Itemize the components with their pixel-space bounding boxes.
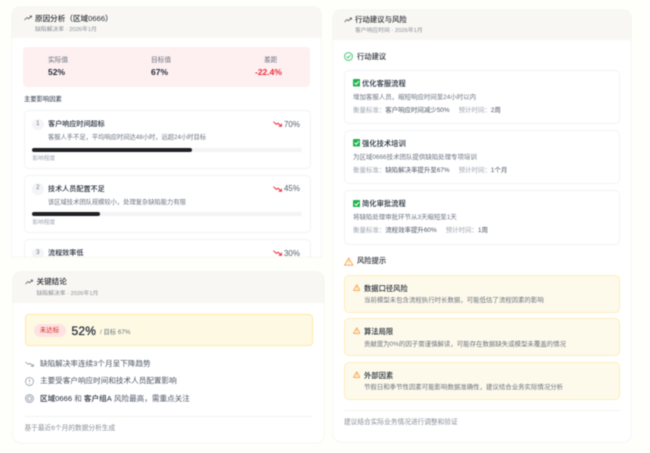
risk card 1: [344, 274, 620, 312]
risk description 2: 贡献度为0%的因子需谨慎解读，可能存在数据缺失或模型未覆盖的情况: [364, 340, 566, 348]
footer note: 建议结合实际业务情况进行调整和验证: [344, 419, 458, 426]
factor percent 2: 45%: [284, 184, 300, 193]
rank number 3: [32, 248, 44, 259]
rank number 1: [32, 118, 44, 130]
factor percent 1: 70%: [284, 120, 300, 128]
section heading: risks: 风险提示: [357, 256, 386, 265]
factor description 2: 该区域技术团队规模较小，处理复杂缺陷能力有限: [48, 199, 186, 206]
factor description 1: 客服人手不足，平均响应时间达48小时，远超24小时目标: [48, 134, 206, 141]
subtitle: 缺陷解决率 · 2026年1月: [35, 26, 97, 32]
conclusion 1: [24, 358, 151, 368]
action card 1: [344, 70, 620, 124]
action description 1: 增加客服人员，缩短响应时间至24小时以内: [353, 94, 476, 100]
value: 52%: 52%: [72, 324, 96, 338]
heading: main factors: 主要影响因素: [24, 96, 62, 103]
heading: actions and risks: 行动建议与风险: [355, 15, 407, 24]
label: target: 目标值: [151, 56, 171, 64]
action description 3: 将缺陷处理审批环节从3天缩短至1天: [353, 214, 457, 221]
factor card 3 (clipped): [24, 239, 310, 298]
icon: trend line: [24, 14, 33, 21]
status box: [24, 314, 312, 346]
badge: below target: 未达标: [40, 327, 59, 334]
value: gap: -22.4%: [255, 67, 282, 77]
rank number 1: 1: [36, 120, 39, 126]
factor card 2: [24, 175, 310, 233]
icon: red down arrow: [272, 120, 283, 128]
risk description 3: 节假日和季节性因素可能影响数据准确性，建议结合业务实际情况分析: [364, 384, 563, 391]
factor card 1: [24, 110, 310, 168]
icon: target circle: [24, 394, 34, 404]
icon: down trend: [24, 362, 34, 368]
conclusion 3: [24, 394, 190, 404]
conclusion text 1: 缺陷解决率连续3个月呈下降趋势: [40, 358, 151, 368]
icon: warning triangle: [344, 257, 354, 266]
icon: red down arrow: [272, 250, 283, 257]
impact label 1: 影响程度: [32, 156, 55, 162]
panel header: cause analysis: [12, 7, 321, 38]
conclusion 2: [24, 376, 177, 386]
icon: check box: [352, 138, 361, 148]
subtitle: 缺陷解决率 · 2026年1月: [36, 290, 98, 296]
rank number 3: 3: [36, 250, 39, 256]
label: actual: 实际值: [48, 56, 68, 64]
factor title 2: 技术人员配置不足: [48, 185, 105, 193]
icon: check box: [352, 199, 361, 208]
impact bar 1: [32, 148, 302, 152]
action measures 3: 衡量标准：流程效率提升60% 预计时间：1周: [353, 227, 488, 234]
panel header: key conclusions: [13, 272, 324, 302]
label: gap: 差距: [264, 56, 277, 64]
impact label 2: 影响程度: [32, 220, 55, 226]
subtitle: 客户响应时间 · 2026年1月: [355, 28, 423, 34]
risk title 2: 算法局限: [364, 326, 393, 336]
rank number 2: 2: [36, 185, 39, 191]
target note: / 目标 67%: [100, 328, 130, 336]
risk description 1: 当前模型未包含流程执行时长数据，可能低估了流程因素的影响: [364, 297, 544, 304]
value: target: 67%: [151, 67, 168, 77]
icon: trend line: [24, 278, 34, 285]
badge: below target: [34, 324, 66, 337]
conclusion text 2: 主要受客户响应时间和技术人员配置影响: [40, 376, 177, 385]
panel: key conclusions: [13, 272, 324, 442]
action measures 2: 衡量标准：缺陷解决率提升至67% 预计时间：1个月: [353, 166, 507, 174]
heading: cause analysis: 原因分析（区域0666）: [35, 14, 113, 22]
impact bar 2: [32, 212, 302, 216]
icon: warning: [352, 326, 361, 335]
action title 3: 简化审批流程: [362, 199, 406, 208]
action card 2: [344, 130, 620, 184]
icon: check box: [352, 78, 361, 88]
rank number 2: [32, 183, 44, 195]
factor title 1: 客户响应时间超标: [48, 120, 105, 128]
metric summary box: [23, 47, 310, 87]
risk card 2: [344, 318, 620, 356]
section heading: actions: 行动建议: [357, 52, 386, 60]
footer note: 基于最近6个月的数据分析生成: [24, 425, 115, 432]
action measures 1: 衡量标准：客户响应时间减少50% 预计时间：2周: [353, 106, 501, 114]
value: actual: 52%: [48, 67, 65, 77]
icon: trend line: [344, 16, 353, 23]
panel: cause analysis: [12, 7, 321, 256]
action title 1: 优化客服流程: [362, 79, 406, 88]
action card 3: [344, 190, 620, 244]
icon: warning: [352, 284, 361, 292]
panel: actions and risks: [333, 10, 630, 442]
heading: key conclusions: 关键结论: [36, 277, 67, 286]
risk title 3: 外部因素: [364, 370, 393, 380]
panel header: actions and risks: [333, 10, 630, 40]
icon: green check circle: [343, 51, 354, 62]
icon: warning: [352, 370, 361, 379]
icon: info circle: [24, 376, 34, 386]
action description 2: 为区域0666技术团队提供缺陷处理专项培训: [353, 154, 477, 160]
conclusion text 3: 区域0666 和 客户组A 风险最高，需重点关注: [40, 394, 190, 402]
icon: red down arrow: [272, 186, 283, 193]
action title 2: 强化技术培训: [362, 139, 406, 148]
risk title 1: 数据口径风险: [364, 284, 408, 292]
risk card 3: [344, 362, 620, 400]
